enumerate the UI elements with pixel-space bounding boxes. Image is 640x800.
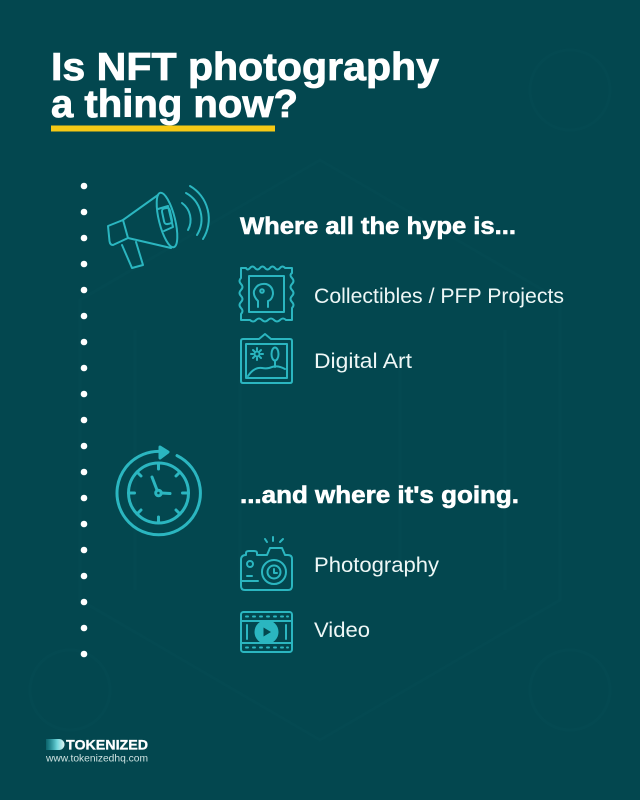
dotted timeline <box>81 183 87 657</box>
title: a thing now? <box>51 83 298 126</box>
icon: framed painting <box>241 334 292 383</box>
icon: stamp with portrait <box>240 266 294 322</box>
label: collectibles: Collectibles / PFP Projects <box>314 285 564 308</box>
icon: camera <box>241 537 292 590</box>
heading: where all the hype is: Where all the hype is... <box>240 213 516 240</box>
title: Is NFT photography <box>51 46 439 89</box>
logo: tokenized: www.tokenizedhq.com <box>45 754 148 764</box>
icon: megaphone <box>108 186 209 268</box>
icon: clock with circular arrow <box>117 447 200 535</box>
heading: and where it's going: ...and where it's going. <box>240 482 519 509</box>
label: digital art: Digital Art <box>314 350 412 373</box>
label: video: Video <box>314 619 370 642</box>
logo: tokenized: TOKENIZED <box>66 738 148 752</box>
logo: tokenized <box>45 738 148 764</box>
title underline <box>51 126 275 132</box>
title <box>51 46 439 126</box>
label: photography: Photography <box>314 554 440 577</box>
icon: video film strip <box>241 612 292 652</box>
